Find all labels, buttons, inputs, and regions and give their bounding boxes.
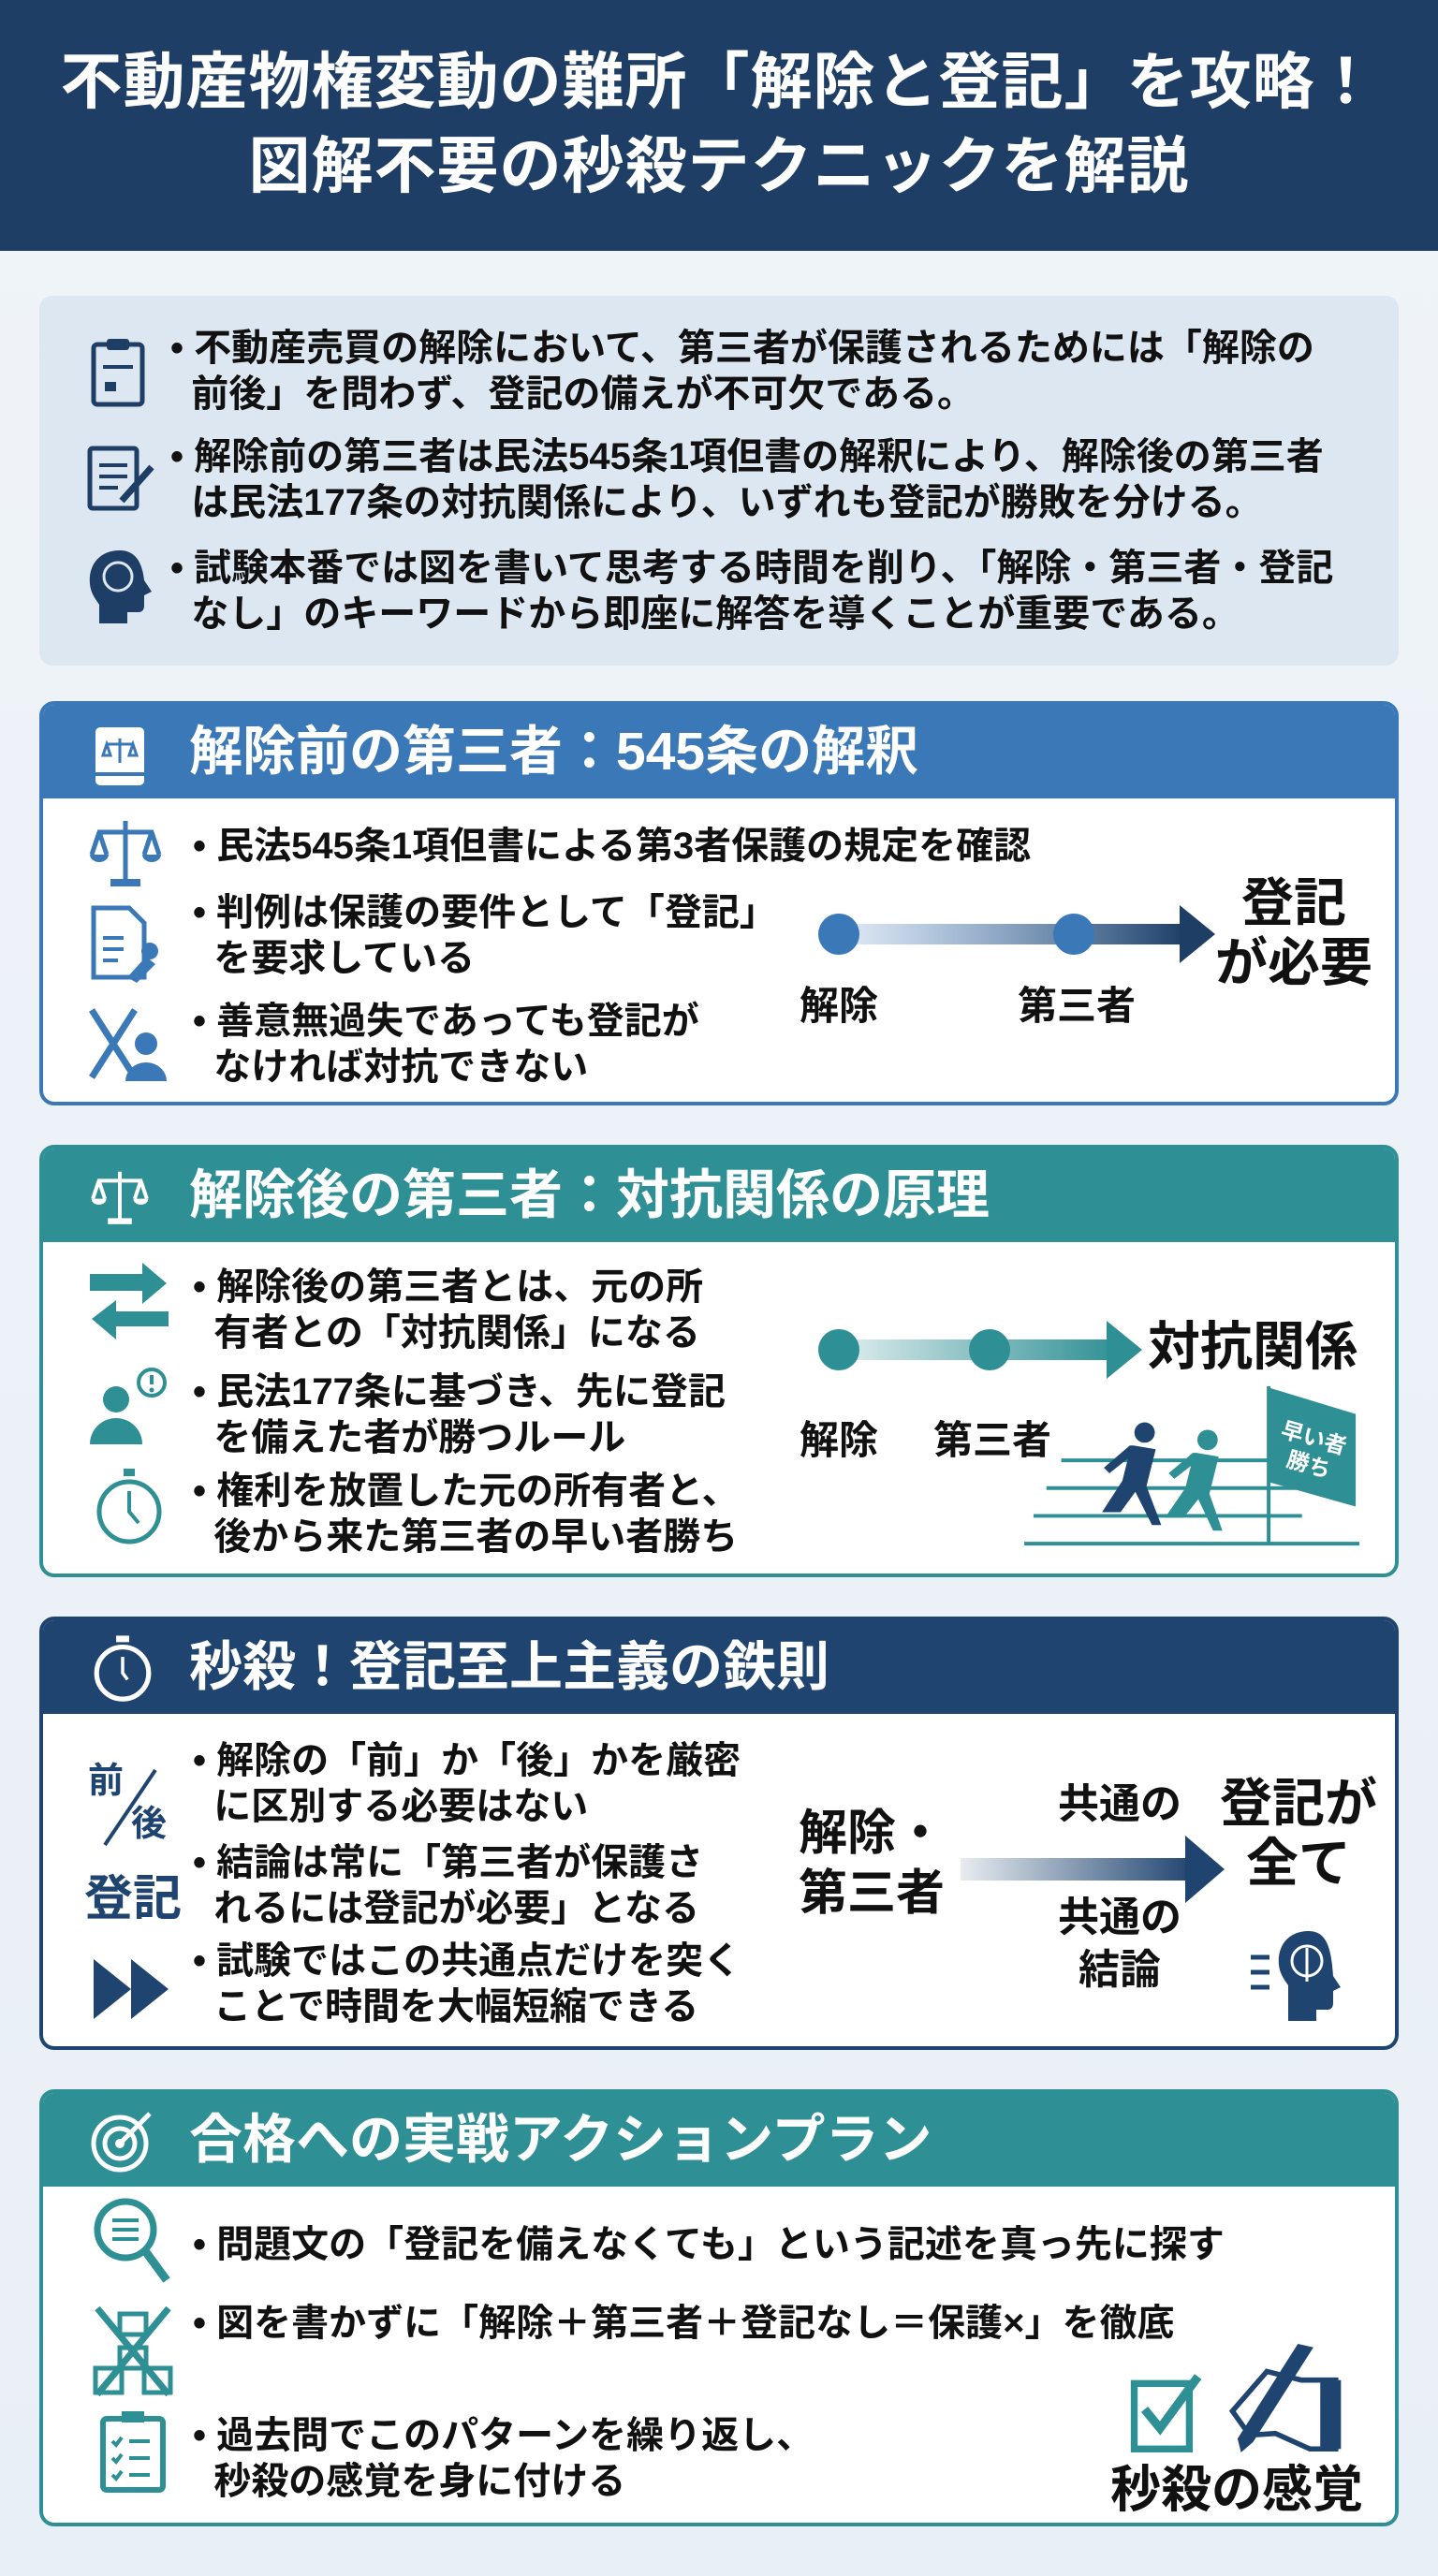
- icon: target: [92, 2112, 152, 2172]
- text: bullet 2-2: [193, 1371, 726, 1458]
- icon: checklist: [100, 2411, 166, 2493]
- icon: law book: [95, 727, 144, 785]
- icon: magnifier: [94, 2198, 170, 2283]
- label: 共通の: 共通の: [1058, 1781, 1181, 1827]
- text: bullet 2-1: • 解除後の第三者とは、元の所: [193, 1266, 703, 1308]
- icon: fast forward: [94, 1959, 169, 2019]
- label: 登記が全て: 全て: [1246, 1834, 1351, 1893]
- panel: summary: [39, 296, 1399, 666]
- text: bullet 3-2: れるには登記が必要」となる: [213, 1888, 699, 1929]
- icon: stopwatch: [97, 1469, 161, 1544]
- text: bullet 4-3: [193, 2415, 814, 2502]
- text: bullet 2-3: [193, 1471, 740, 1558]
- text: summary 1: • 不動産売買の解除において、第三者が保護されるためには「解除の: [170, 328, 1314, 369]
- label: 共通の結論: [1058, 1895, 1181, 1993]
- text: bullet 3-2: [193, 1842, 703, 1929]
- text: bullet 1-2: [193, 892, 777, 979]
- text: bullet 1-2: • 判例は保護の要件として「登記」: [193, 892, 777, 933]
- text: bullet 4-2: • 図を書かずに「解除＋第三者＋登記なし＝保護×」を徹底: [193, 2303, 1174, 2344]
- heading: section 2: 解除後の第三者：対抗関係の原理: [189, 1165, 990, 1225]
- chart: timeline 2: [800, 1317, 1359, 1546]
- title: 図解不要の秒殺テクニックを解説: [249, 131, 1189, 200]
- panel: section 1: [39, 701, 1399, 1105]
- panel: section 3: [39, 1617, 1399, 2050]
- icon: check and pen: [1131, 2344, 1341, 2452]
- text: summary 2: • 解除前の第三者は民法545条1項但書の解釈により、解除後の第三者: [170, 436, 1324, 477]
- text: bullet 1-3: [193, 1001, 699, 1088]
- heading: section 3: [43, 1620, 1395, 1714]
- heading: section 1: 解除前の第三者：545条の解釈: [189, 722, 918, 782]
- text: bullet 4-3: 秒殺の感覚を身に付ける: [213, 2461, 625, 2502]
- title: [0, 0, 1438, 251]
- text: bullet 4-3: • 過去問でこのパターンを繰り返し、: [193, 2415, 814, 2456]
- icon: arrows exchange: [90, 1263, 169, 1339]
- label: 登記が全て: 登記が: [1220, 1774, 1377, 1833]
- panel: section 2: [39, 1145, 1399, 1577]
- icon: 前後: [88, 1762, 167, 1846]
- label: 解除・第三者: 第三者: [799, 1866, 945, 1921]
- text: summary 3: [170, 548, 1333, 635]
- panel: section 4: [39, 2089, 1399, 2526]
- text: bullet 2-2: を備えた者が勝つルール: [213, 1417, 625, 1458]
- label: 対抗関係: 対抗関係: [1148, 1317, 1357, 1376]
- icon: header scales: [91, 1172, 149, 1224]
- text: bullet 3-3: ことで時間を大幅短縮できる: [213, 1986, 698, 2027]
- icon: brain speed: [1251, 1931, 1341, 2021]
- label: 共通の結論: 共通の: [1058, 1895, 1181, 1940]
- text: bullet 3-2: • 結論は常に「第三者が保護さ: [193, 1842, 703, 1883]
- title: 不動産物権変動の難所「解除と登記」を攻略！: [60, 47, 1378, 116]
- text: bullet 2-1: [193, 1266, 703, 1354]
- label: 登記が必要: 登記: [1241, 873, 1346, 932]
- chart: timeline 1: [800, 873, 1372, 1028]
- icon: runners race: 早い者: [1278, 1417, 1349, 1460]
- text: bullet 4-1: • 問題文の「登記を備えなくても」という記述を真っ先に探す: [193, 2224, 1225, 2265]
- label: 秒殺の感覚: 秒殺の感覚: [1110, 2462, 1363, 2518]
- icon: runners race: [1024, 1386, 1359, 1546]
- label: 解除: 解除: [800, 984, 878, 1028]
- label: 登記が必要: [1215, 873, 1372, 992]
- heading: section 4: [43, 2093, 1395, 2187]
- icon: document stamp: [92, 906, 158, 983]
- icon: clipboard: [92, 339, 144, 406]
- icon: scales: [90, 821, 161, 886]
- text: bullet 3-1: に区別する必要はない: [213, 1786, 588, 1827]
- label: 解除: 解除: [800, 1418, 878, 1462]
- text: summary 2: は民法177条の対抗関係により、いずれも登記が勝敗を分ける。: [191, 482, 1263, 523]
- text: bullet 1-1: • 民法545条1項但書による第3者保護の規定を確認: [193, 826, 1031, 867]
- text: bullet 3-1: [193, 1740, 741, 1827]
- text: bullet 3-1: • 解除の「前」か「後」かを厳密: [193, 1740, 741, 1781]
- text: bullet 1-2: を要求している: [213, 938, 475, 979]
- text: summary 1: [170, 328, 1314, 415]
- heading: section 1: [43, 705, 1395, 798]
- icon: X person: [89, 1008, 167, 1081]
- label: 登記が必要: が必要: [1215, 933, 1372, 992]
- text: bullet 2-1: 有者との「対抗関係」になる: [213, 1312, 700, 1354]
- text: bullet 1-3: なければ対抗できない: [213, 1046, 588, 1088]
- text: bullet 2-3: • 権利を放置した元の所有者と、: [193, 1471, 740, 1512]
- text: bullet 3-3: • 試験ではこの共通点だけを突く: [193, 1940, 741, 1982]
- text: summary 1: 前後」を問わず、登記の備えが不可欠である。: [191, 373, 975, 415]
- label: 共通の結論: 結論: [1078, 1947, 1161, 1993]
- icon: crossed diagram: [94, 2306, 172, 2396]
- label: 第三者: 第三者: [933, 1418, 1051, 1462]
- label: 解除・第三者: [799, 1807, 945, 1921]
- label: 第三者: 第三者: [1018, 984, 1136, 1028]
- text: summary 3: • 試験本番では図を書いて思考する時間を削り、「解除・第三者・登記: [170, 548, 1333, 589]
- heading: section 3: 秒殺！登記至上主義の鉄則: [189, 1637, 829, 1697]
- icon: runners race: 勝ち: [1284, 1447, 1333, 1484]
- icon: 登記: 登記: [84, 1872, 182, 1926]
- text: bullet 3-3: [193, 1940, 741, 2027]
- icon: document pen: [88, 446, 154, 511]
- icon: 前後: 前: [88, 1762, 124, 1801]
- heading: section 2: [43, 1149, 1395, 1242]
- icon: header stopwatch: [94, 1635, 152, 1702]
- heading: section 4: 合格への実戦アクションプラン: [189, 2110, 932, 2170]
- text: summary 3: なし」のキーワードから即座に解答を導くことが重要である。: [191, 593, 1240, 635]
- icon: person alert: [90, 1368, 167, 1444]
- label: 解除・第三者: 解除・: [799, 1807, 945, 1861]
- icon: brain head: [90, 550, 152, 623]
- text: bullet 1-3: • 善意無過失であっても登記が: [193, 1001, 699, 1042]
- text: bullet 2-3: 後から来た第三者の早い者勝ち: [213, 1516, 738, 1558]
- text: summary 2: [170, 436, 1324, 523]
- text: bullet 2-2: • 民法177条に基づき、先に登記: [193, 1371, 726, 1412]
- label: 登記が全て: [1220, 1774, 1377, 1893]
- icon: 前後: 後: [131, 1805, 167, 1844]
- chart: common conclusion: [799, 1774, 1377, 2021]
